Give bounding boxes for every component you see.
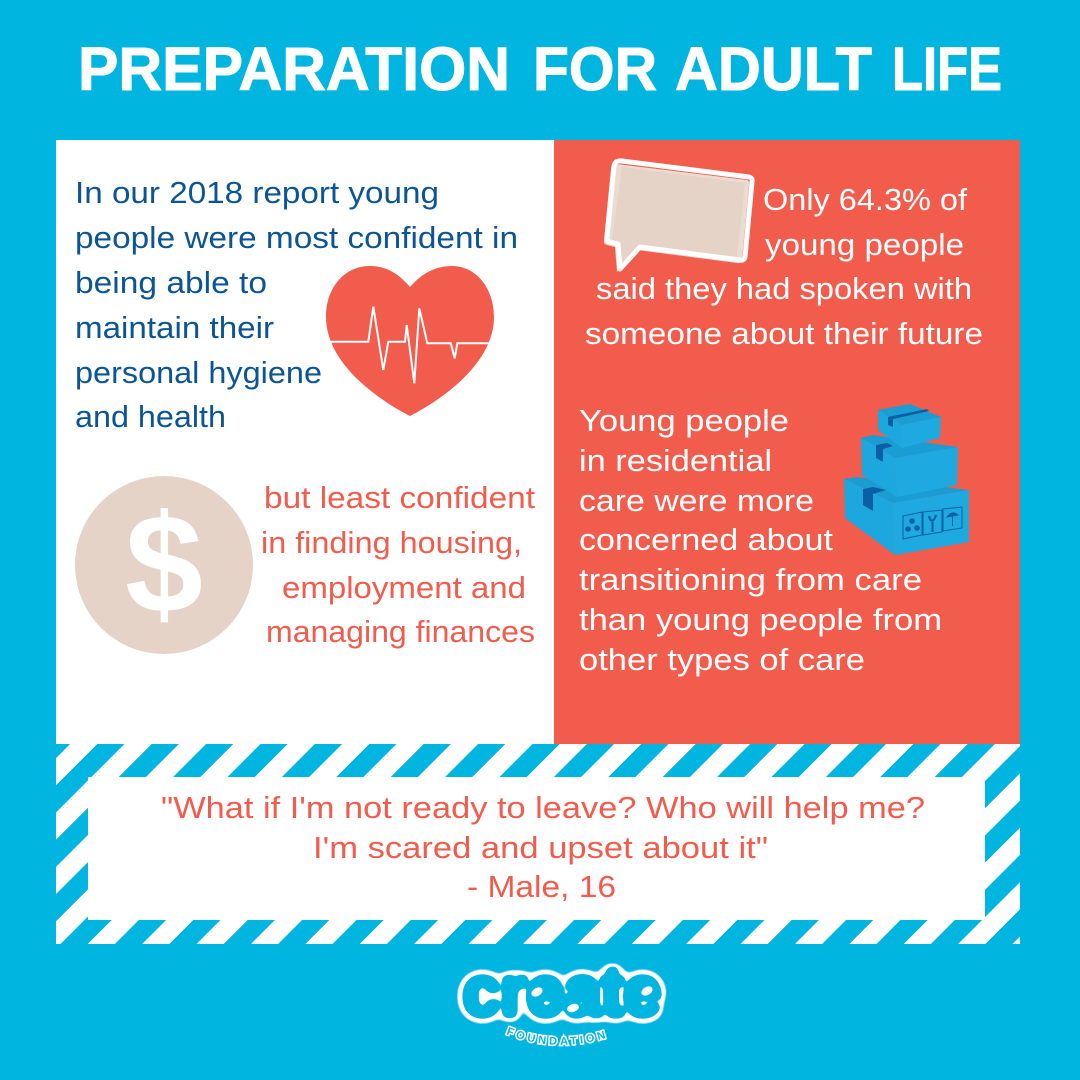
icon: handling symbols bbox=[903, 507, 962, 539]
text: residential care: care were more bbox=[579, 483, 814, 518]
icon: dollar coin: $ bbox=[125, 485, 203, 642]
logo: Create Foundation: FOUNDATION bbox=[504, 1025, 607, 1046]
text: most confident: maintain their bbox=[75, 310, 274, 345]
text: residential care: than young people from bbox=[579, 602, 942, 637]
text: most confident: people were most confident in bbox=[75, 220, 518, 255]
icon: dollar coin bbox=[75, 476, 253, 654]
panel: conversations and transitions bbox=[554, 140, 1020, 744]
text: residential care bbox=[579, 403, 942, 677]
text: most confident: In our 2018 report young bbox=[75, 175, 439, 210]
text: most confident: and health bbox=[75, 399, 226, 434]
text: least confident: but least confident bbox=[264, 480, 535, 515]
text: residential care: Young people bbox=[579, 403, 789, 438]
text: most confident bbox=[75, 175, 518, 434]
text: spoken about future: Only 64.3% of bbox=[763, 182, 967, 217]
logo: Create Foundation: create bbox=[463, 952, 661, 1030]
text: least confident: managing finances bbox=[266, 614, 535, 649]
icon: stacked boxes bbox=[844, 404, 969, 555]
title: PREPARATION bbox=[78, 35, 510, 103]
text: quote bbox=[161, 790, 925, 904]
text: least confident bbox=[261, 480, 535, 649]
text: spoken about future: someone about their future bbox=[585, 316, 983, 351]
text: residential care: in residential bbox=[579, 443, 772, 478]
text: quote: - Male, 16 bbox=[467, 869, 616, 904]
quote panel with striped border bbox=[56, 744, 1020, 944]
text: residential care: transitioning from care bbox=[579, 562, 922, 597]
title: ADULT bbox=[675, 35, 872, 103]
title bbox=[78, 35, 1002, 103]
text: spoken about future: said they had spoken with bbox=[596, 271, 972, 306]
panel: confidence findings bbox=[56, 140, 554, 744]
title: LIFE bbox=[892, 35, 1002, 103]
text: most confident: personal hygiene bbox=[75, 355, 322, 390]
text: spoken about future: young people bbox=[765, 227, 964, 262]
text: residential care: concerned about bbox=[579, 522, 833, 557]
text: quote: I'm scared and upset about it" bbox=[313, 830, 768, 865]
text: spoken about future bbox=[585, 182, 983, 351]
text: quote: "What if I'm not ready to leave? Who will help me? bbox=[161, 790, 925, 825]
text: least confident: in finding housing, bbox=[261, 525, 522, 560]
title: FOR bbox=[533, 35, 657, 103]
icon: speech bubble bbox=[604, 161, 752, 272]
text: residential care: other types of care bbox=[579, 642, 865, 677]
text: least confident: employment and bbox=[282, 570, 526, 605]
icon: heart with pulse bbox=[326, 266, 494, 416]
text: most confident: being able to bbox=[75, 265, 267, 300]
